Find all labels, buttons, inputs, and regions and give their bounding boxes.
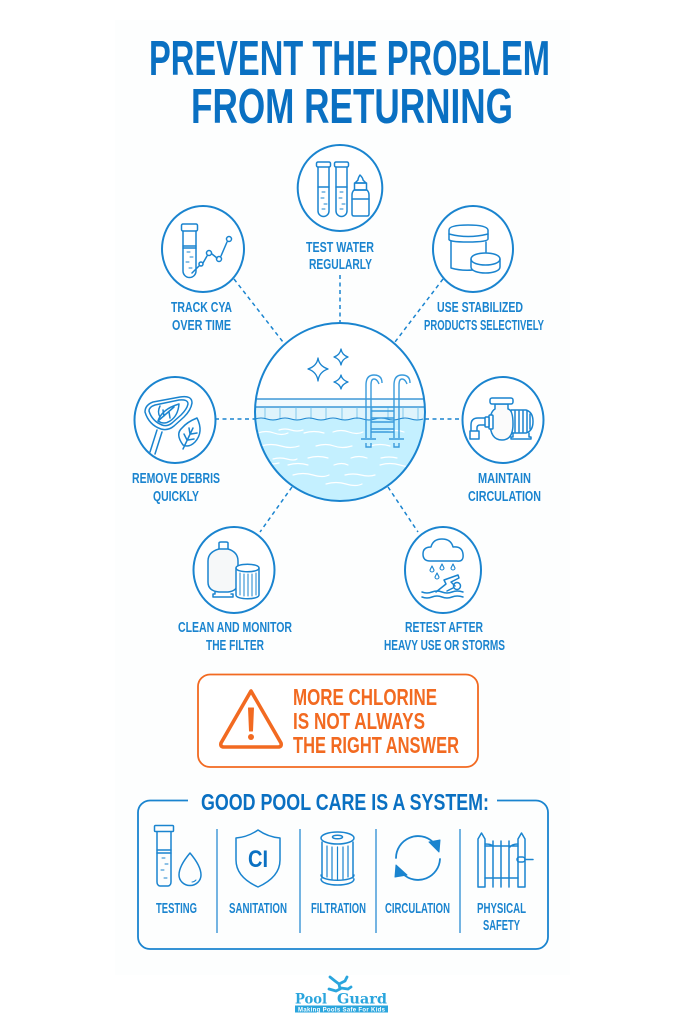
icon: pool pump (470, 398, 533, 440)
label: HEAVY USE OR STORMS (384, 638, 505, 654)
step: maintain circulation (462, 377, 544, 505)
item: sanitation (229, 830, 287, 917)
label: USE STABILIZED (437, 300, 523, 316)
step: test water regularly (298, 145, 382, 273)
item: physical safety: PHYSICAL (477, 901, 526, 917)
item: testing (154, 826, 201, 917)
label: QUICKLY (153, 489, 199, 505)
item: circulation (385, 836, 450, 917)
item: circulation: CIRCULATION (385, 901, 450, 917)
warning text (293, 684, 459, 758)
panel: good pool care is a system (138, 789, 548, 949)
item: sanitation: CI (248, 846, 268, 873)
warning text: IS NOT ALWAYS (293, 708, 425, 734)
central pool illustration (250, 323, 430, 504)
label: MAINTAIN (478, 471, 531, 487)
title (149, 32, 550, 134)
logo: Pool Guard: Guard (337, 992, 387, 1008)
label (468, 471, 541, 505)
label: CIRCULATION (468, 489, 541, 505)
warning text: THE RIGHT ANSWER (293, 732, 459, 758)
dashed connectors (215, 275, 463, 532)
logo: Pool Guard: Pool (295, 992, 327, 1008)
logo: Pool Guard (295, 977, 388, 1014)
item: filtration (311, 832, 366, 917)
label (306, 240, 374, 273)
label: REMOVE DEBRIS (132, 471, 220, 487)
label: PRODUCTS SELECTIVELY (424, 318, 544, 334)
step: stabilized products (424, 206, 544, 334)
label (171, 300, 232, 334)
step: retest after storms (384, 527, 505, 654)
label: TEST WATER (306, 240, 374, 256)
step: clean the filter (178, 527, 292, 654)
title: FROM RETURNING (191, 80, 513, 134)
icon: sand filter and cartridge (208, 542, 259, 599)
icon: pool ladder (361, 375, 410, 447)
item: testing: TESTING (156, 901, 197, 917)
icon: rain cloud and swimmer (422, 539, 463, 598)
label (178, 620, 292, 654)
label: CLEAN AND MONITOR (178, 620, 292, 636)
icon: test tubes and dropper (316, 162, 369, 216)
label (384, 620, 505, 654)
label: RETEST AFTER (405, 620, 483, 636)
icon: warning triangle (221, 691, 281, 747)
icon: sparkles (308, 349, 348, 389)
icon: jar and tablet (449, 225, 500, 273)
step: track CYA (162, 206, 244, 334)
logo: Pool Guard: Making Pools Safe For Kids (298, 1008, 386, 1014)
item: sanitation: SANITATION (229, 901, 287, 917)
label: THE FILTER (206, 638, 264, 654)
label: TRACK CYA (171, 300, 232, 316)
icon: skimmer net and leaf (145, 397, 200, 454)
callout: chlorine warning (198, 674, 478, 767)
label: REGULARLY (309, 257, 372, 273)
step: remove debris (132, 377, 220, 505)
item: physical safety: SAFETY (483, 918, 520, 934)
panel heading: GOOD POOL CARE IS A SYSTEM: (201, 789, 489, 815)
warning text: MORE CHLORINE (293, 684, 437, 710)
icon: splash figure (329, 977, 351, 991)
label: OVER TIME (172, 318, 231, 334)
item: filtration: FILTRATION (311, 901, 366, 917)
item: physical safety (477, 833, 533, 934)
icon: tube and trend chart (182, 224, 232, 278)
label (424, 300, 544, 334)
label (132, 471, 220, 505)
